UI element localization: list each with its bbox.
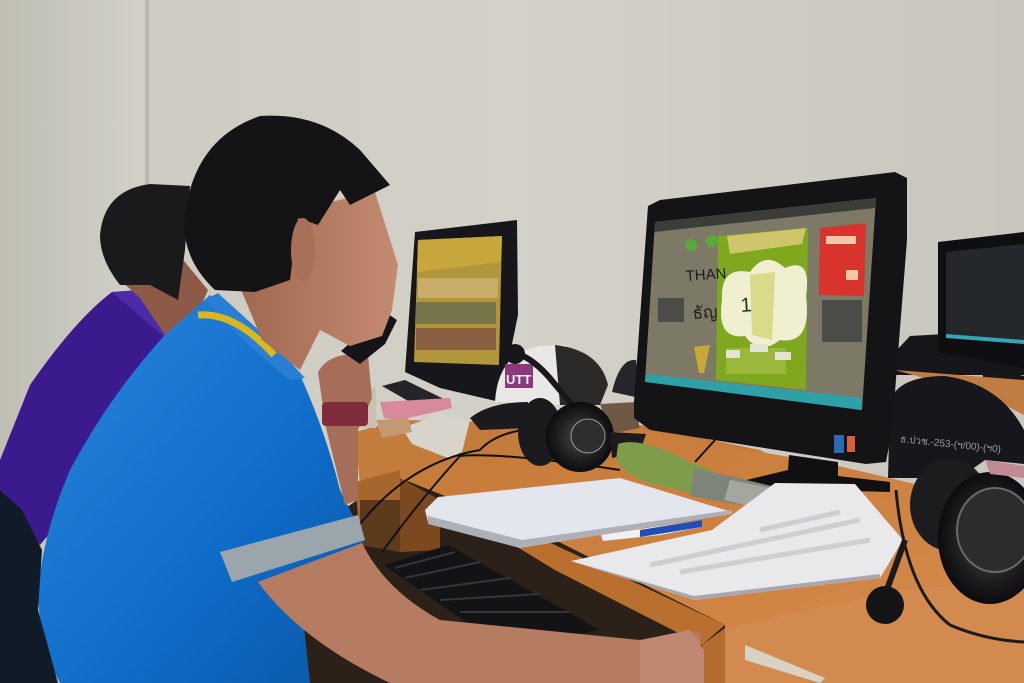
papers	[425, 478, 903, 600]
hand	[640, 630, 704, 683]
centre headset	[505, 344, 646, 472]
far right desk and chair	[888, 370, 1024, 478]
sleeve band	[220, 515, 365, 582]
cap	[470, 345, 640, 432]
front desk	[400, 428, 1024, 683]
artwork on screen: 1	[740, 294, 752, 317]
screen Thai text: ธัญ	[692, 302, 718, 323]
watch	[322, 402, 368, 426]
neck and face	[235, 192, 398, 370]
artwork on screen	[658, 223, 866, 390]
umbrella	[616, 442, 772, 505]
far right monitor	[895, 232, 1024, 392]
lanyard	[198, 315, 274, 355]
far right desk and chair: ธ.ปวช.-253-(ฯ/00)-(ฯ0)	[900, 434, 1001, 456]
cables	[360, 428, 715, 552]
person in blue	[0, 116, 704, 683]
hair	[184, 116, 390, 292]
pen	[601, 520, 702, 541]
chair	[0, 490, 58, 683]
arm	[258, 543, 704, 683]
keyboard	[384, 545, 600, 640]
desk label	[745, 645, 825, 683]
collar	[205, 293, 305, 380]
person in purple	[0, 184, 208, 545]
back desk	[355, 420, 800, 552]
centre monitor	[382, 220, 518, 402]
items on back desk: cup, pink book, plastic bag	[358, 388, 470, 458]
forearm	[318, 354, 372, 505]
cap: UTT	[506, 372, 531, 387]
right headset	[866, 459, 1024, 642]
phone	[341, 312, 397, 364]
main monitor	[634, 172, 907, 492]
ear	[291, 218, 315, 282]
under-desk shadow	[300, 470, 725, 683]
screen text: THAN	[685, 265, 727, 285]
torso	[38, 295, 365, 683]
